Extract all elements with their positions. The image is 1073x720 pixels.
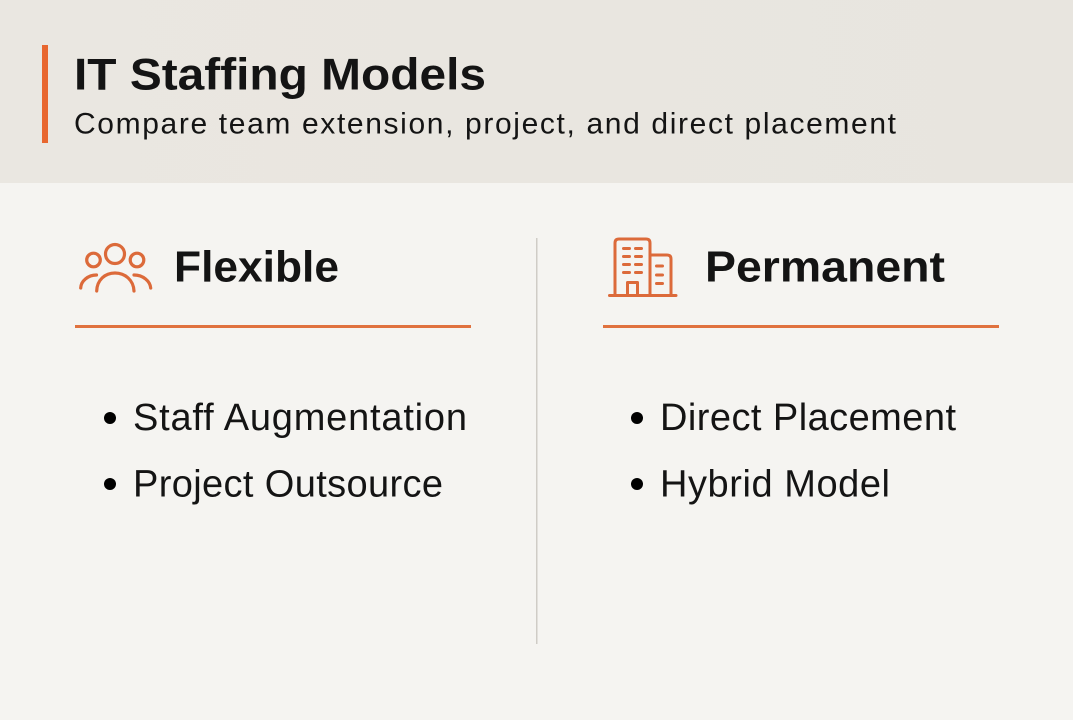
panel: permanent <box>603 239 999 506</box>
subtitle: Compare team extension, project, and direct placement <box>74 108 897 140</box>
bullet item: Staff Augmentation: Staff Augmentation <box>133 397 467 439</box>
bullet item: Hybrid Model: Hybrid Model <box>660 464 890 506</box>
bullet item: Direct Placement: Direct Placement <box>660 397 956 439</box>
header accent bar <box>42 45 48 143</box>
header band <box>0 0 1073 183</box>
bullet item: Project Outsource: Project Outsource <box>133 464 443 506</box>
heading rule <box>603 325 999 328</box>
heading: Flexible: Flexible <box>174 242 339 292</box>
column divider <box>536 238 538 644</box>
bullet list: permanent <box>631 397 956 506</box>
icon: people group <box>81 244 151 291</box>
panel: flexible <box>75 242 471 506</box>
title: IT Staffing Models <box>74 50 486 100</box>
heading rule <box>75 325 471 328</box>
icon: office buildings <box>610 239 676 296</box>
bullet list: flexible <box>104 397 467 506</box>
heading: Permanent: Permanent <box>705 242 945 292</box>
